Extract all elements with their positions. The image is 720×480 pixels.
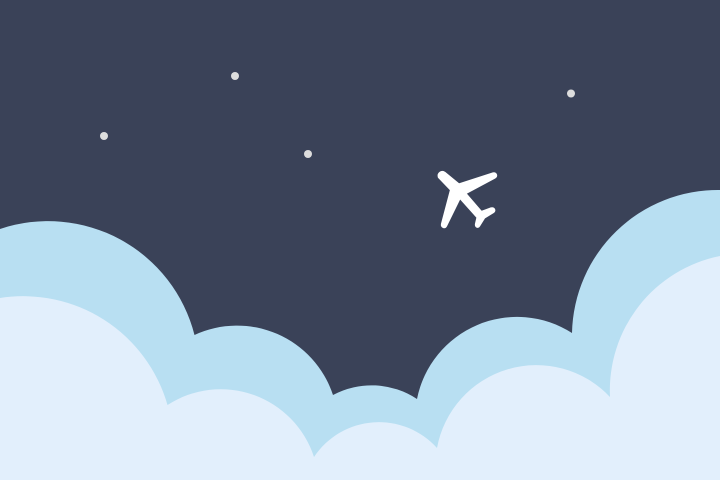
stars bbox=[100, 72, 575, 158]
back cloud layer bbox=[0, 190, 720, 480]
front cloud layer bbox=[0, 256, 720, 480]
icon: airplane bbox=[438, 172, 497, 228]
